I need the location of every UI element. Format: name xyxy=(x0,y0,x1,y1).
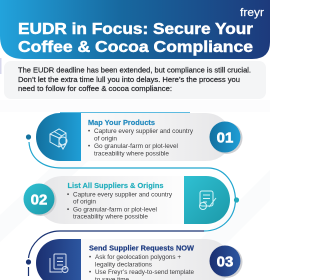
step 3 bullets: Use Freyr’s ready-to-send template xyxy=(95,270,195,276)
step 3 number badge xyxy=(210,246,242,278)
intro panel xyxy=(4,61,266,99)
connector: card 2 to card 3 xyxy=(28,231,204,258)
step 2 card xyxy=(24,176,239,224)
step 2 heading: List All Suppliers & Origins xyxy=(68,181,164,190)
step 1 bullets: • xyxy=(88,129,90,135)
step 2 number badge xyxy=(24,184,56,216)
step 3 number badge: 03 xyxy=(217,254,233,270)
step 2 bullets: Capture every supplier and country xyxy=(73,192,172,198)
title xyxy=(18,21,253,56)
title: EUDR in Focus: Secure Your xyxy=(18,21,253,38)
step 1 heading: Map Your Products xyxy=(88,118,155,127)
icon: box with location pin xyxy=(50,129,67,149)
step 1 number badge xyxy=(210,122,242,154)
icon panel xyxy=(36,113,81,161)
step 3 bullets: legality declarations xyxy=(95,262,152,268)
step 1 bullets: Capture every supplier and country xyxy=(94,129,193,135)
dot xyxy=(26,259,31,265)
step 3 bullets: • xyxy=(89,255,91,261)
step 3 bullets: Ask for geolocation polygons + xyxy=(95,255,182,261)
icon: checklist and pen xyxy=(200,191,216,210)
step 2 number badge: 02 xyxy=(31,192,47,208)
dot xyxy=(234,197,239,203)
card body xyxy=(60,113,230,161)
step 2 bullets: of origin xyxy=(73,200,96,206)
step 2 bullets: Go granular-farm or plot-level xyxy=(73,208,157,214)
header banner xyxy=(0,0,270,59)
step 3 bullets xyxy=(89,255,195,280)
step 1 bullets: • xyxy=(88,144,90,150)
intro panel: The EUDR deadline has been extended, but compliance is still crucial. xyxy=(18,66,251,74)
step 3 bullets: • xyxy=(89,270,91,276)
title: Coffee & Cocoa Compliance xyxy=(18,39,253,56)
step 1 bullets: Go granular-farm or plot-level xyxy=(94,144,178,150)
card body xyxy=(40,176,184,224)
step 1 bullets: of origin xyxy=(94,136,117,142)
card body xyxy=(60,239,230,280)
step 2 bullets xyxy=(67,192,172,220)
step 1 bullets xyxy=(88,129,193,158)
step 1 card xyxy=(26,112,243,161)
step 2 bullets: • xyxy=(67,208,69,214)
step 3 heading: Send Supplier Requests NOW xyxy=(89,244,194,252)
icon panel xyxy=(184,176,230,224)
step 2 bullets: • xyxy=(67,192,69,198)
icon: document on cart xyxy=(50,254,68,272)
step 1 number badge: 01 xyxy=(217,130,233,146)
logo: freyr: freyr xyxy=(240,7,264,19)
step 3 card xyxy=(26,239,243,280)
icon panel xyxy=(36,239,81,280)
intro panel: Don’t let the extra time lull you into delays. Here’s the process you xyxy=(18,75,240,84)
intro panel: need to follow for coffee & cocoa compliance: xyxy=(18,84,172,93)
dot xyxy=(26,134,31,140)
connector: card 1 to card 2 xyxy=(29,142,236,231)
step 2 bullets: traceability where possible xyxy=(73,214,149,220)
step 1 bullets: traceability where possible xyxy=(94,152,170,158)
